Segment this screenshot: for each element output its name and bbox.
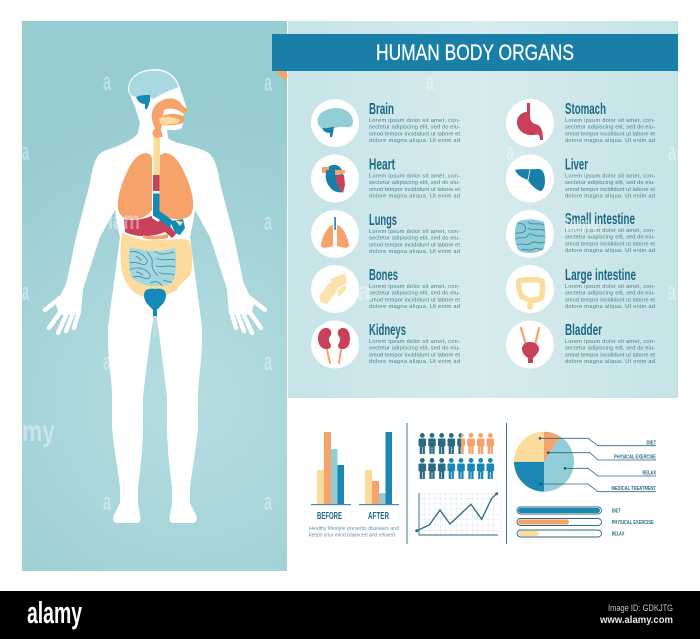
organ item: brain: dolore magna aliqua. Ut enim ad: [369, 138, 460, 144]
organ item: lungs: Lungs: [369, 212, 397, 229]
icon: heart: [322, 165, 345, 193]
icon: stomach: [517, 103, 543, 140]
liver: [170, 219, 185, 235]
organ item: lungs: sectetur adipiscing elit, sed do eiu-: [369, 236, 460, 242]
pie chart with leaders: [514, 432, 656, 492]
organ item: kidneys: [311, 320, 460, 368]
watermarks: lamy: [565, 212, 600, 237]
panel: left body background: [22, 21, 287, 571]
bar: diet: DIET: [612, 508, 621, 514]
organ item: bones: smod tempor incididunt ut labore et: [369, 297, 460, 303]
watermarks: [22, 68, 677, 516]
organ item: large intestine: dolore magna aliqua. Ut enim ad: [565, 304, 655, 310]
organ item: kidneys: Lorem ipsum dolor sit amet, con-: [369, 339, 460, 345]
after bars: [359, 432, 399, 505]
organ item: heart: sectetur adipiscing elit, sed do eiu-: [369, 180, 460, 186]
organ item: heart: smod tempor incididunt ut labore et: [369, 187, 460, 193]
watermarks: a: [426, 68, 435, 96]
organ item: kidneys: dolore magna aliqua. Ut enim ad: [369, 359, 460, 365]
pie labels: DIET: [646, 440, 656, 446]
watermarks: my: [22, 415, 55, 448]
panel: organ list background: [288, 21, 678, 398]
brain in head: [129, 70, 179, 99]
organ item: bladder: Lorem ipsum dolor sit amet, con-: [565, 339, 655, 345]
larynx: [152, 128, 162, 138]
organ item: lungs: smod tempor incididunt ut labore et: [369, 242, 460, 248]
heart: [152, 175, 172, 228]
icon: large intestine: [519, 280, 543, 307]
banner fold: [275, 71, 287, 82]
organ item: small intestine: sectetur adipiscing elit, sed do eiu-: [565, 235, 655, 241]
organ item: large intestine: [506, 265, 655, 313]
organ item: bladder: Bladder: [565, 322, 602, 339]
image id: Image ID: GDKJTG: [608, 603, 673, 613]
organ item: small intestine: [506, 210, 655, 258]
chart caption: Healthy lifestyle prevents diseases and: [309, 526, 399, 532]
organ item: brain: Brain: [369, 101, 394, 118]
watermarks: a: [264, 69, 273, 97]
watermarks: a: [668, 138, 677, 166]
icon: bones: [319, 273, 347, 304]
organ item: liver: dolore magna aliqua. Ut enim ad: [565, 194, 655, 200]
watermarks: a: [264, 348, 273, 376]
pictogram: people: [418, 433, 494, 479]
mouth and throat: [152, 98, 188, 137]
icon: liver: [515, 169, 545, 191]
lungs: [118, 153, 193, 219]
organ item: liver: Lorem ipsum dolor sit amet, con-: [565, 174, 655, 180]
bar: relax: RELAX: [612, 532, 625, 538]
cerebellum: [136, 95, 150, 109]
organ item: bones: sectetur adipiscing elit, sed do eiu-: [369, 291, 460, 297]
watermarks: a: [264, 488, 273, 516]
before label: BEFORE: [317, 511, 342, 522]
organ item: heart: dolore magna aliqua. Ut enim ad: [369, 194, 460, 200]
organ item: large intestine: smod tempor incididunt ut labore et: [565, 297, 655, 303]
watermarks: a: [22, 278, 30, 306]
organ item: small intestine: Lorem ipsum dolor sit amet, con-: [565, 228, 655, 234]
organ item: lungs: [311, 210, 460, 258]
footer bar: [0, 591, 700, 639]
watermarks: a: [264, 208, 273, 236]
icon: brain: [317, 108, 353, 137]
organ item: liver: Liver: [565, 156, 588, 174]
watermarks: la: [348, 276, 373, 306]
organ item: brain: sectetur adipiscing elit, sed do eiu-: [369, 125, 460, 131]
watermarks: a: [103, 68, 112, 96]
organ item: stomach: [506, 99, 655, 147]
trachea: [154, 130, 160, 177]
organ item: bladder: dolore magna aliqua. Ut enim ad: [565, 359, 655, 365]
urethra: [153, 316, 157, 338]
organ item: large intestine: Lorem ipsum dolor sit amet, con-: [565, 284, 655, 290]
pie labels: [612, 440, 656, 492]
organ item: heart: Heart: [369, 156, 395, 174]
line chart: [415, 492, 498, 535]
organ item: stomach: sectetur adipiscing elit, sed do eiu-: [565, 125, 655, 131]
organ item: large intestine: Large intestine: [565, 267, 636, 284]
icon: kidneys: [318, 328, 350, 363]
watermarks: a: [103, 488, 112, 516]
website: www.alamy.com: [599, 614, 673, 626]
pie labels: RELAX: [642, 470, 656, 476]
bar: physical exercise: PHYSICAL EXERCISE: [612, 520, 654, 526]
small intestine: [129, 247, 176, 286]
organ item: small intestine: Small intestine: [565, 211, 635, 228]
chart caption: keeps your mind balanced and relaxed: [309, 532, 395, 538]
organ item: large intestine: sectetur adipiscing elit, sed do eiu-: [565, 291, 655, 297]
pie labels: PHYSICAL EXERCISE: [614, 455, 656, 461]
progress bars: [517, 507, 654, 538]
watermarks: a: [668, 278, 677, 306]
organ item: brain: Lorem ipsum dolor sit amet, con-: [369, 118, 460, 124]
organ item: bones: Lorem ipsum dolor sit amet, con-: [369, 284, 460, 290]
body silhouette: [45, 69, 265, 523]
organ item: liver: [506, 154, 655, 202]
icon: lungs: [321, 217, 349, 248]
organ item: stomach: Lorem ipsum dolor sit amet, con-: [565, 118, 655, 124]
organ item: small intestine: smod tempor incididunt ut labore et: [565, 241, 655, 247]
organ item: kidneys: smod tempor incididunt ut labore et: [369, 352, 460, 358]
organ item: small intestine: dolore magna aliqua. Ut enim ad: [565, 248, 655, 254]
watermarks: a: [103, 348, 112, 376]
header banner: [272, 34, 678, 71]
organ item: lungs: dolore magna aliqua. Ut enim ad: [369, 249, 460, 255]
organ item: bladder: smod tempor incididunt ut labore et: [565, 352, 655, 358]
organ item: lungs: Lorem ipsum dolor sit amet, con-: [369, 229, 460, 235]
pie: [514, 432, 574, 492]
organ item: brain: [311, 99, 460, 147]
title: HUMAN BODY ORGANS: [376, 40, 574, 65]
organ item: bladder: [506, 320, 655, 368]
pancreas: [143, 234, 168, 240]
organ item: heart: Lorem ipsum dolor sit amet, con-: [369, 174, 460, 180]
organ item: kidneys: Kidneys: [369, 322, 406, 339]
human body figure: [45, 69, 265, 523]
organ item: stomach: dolore magna aliqua. Ut enim ad: [565, 138, 655, 144]
organ item: kidneys: sectetur adipiscing elit, sed do eiu-: [369, 346, 460, 352]
chart caption: [309, 526, 399, 538]
stomach and diaphragm: [124, 215, 176, 238]
organ item: bones: dolore magna aliqua. Ut enim ad: [369, 304, 460, 310]
icon: bladder: [521, 328, 539, 363]
bar charts: before and after: [309, 432, 399, 538]
organ item: stomach: smod tempor incididunt ut labore et: [565, 131, 655, 137]
organ item: bones: [311, 265, 460, 313]
bladder: [144, 289, 166, 316]
organ item: stomach: Stomach: [565, 101, 606, 118]
organ item: bladder: sectetur adipiscing elit, sed do eiu-: [565, 346, 655, 352]
organ item: liver: sectetur adipiscing elit, sed do eiu-: [565, 180, 655, 186]
icon: small intestine: [515, 219, 545, 253]
watermarks: lam: [108, 205, 140, 235]
organ item: liver: smod tempor incididunt ut labore et: [565, 187, 655, 193]
large intestine: [120, 233, 192, 297]
after label: AFTER: [368, 511, 389, 522]
organ item: brain: smod tempor incididunt ut labore et: [369, 131, 460, 137]
watermarks: a: [506, 138, 515, 166]
pie labels: MEDICAL TREATMENT: [612, 486, 656, 492]
organ item: heart: [311, 154, 460, 202]
before bars: [311, 432, 351, 505]
footer logo: alamy: [27, 595, 82, 630]
organ item: bones: Bones: [369, 267, 398, 284]
watermarks: a: [22, 138, 30, 166]
leader lines: [540, 438, 656, 492]
